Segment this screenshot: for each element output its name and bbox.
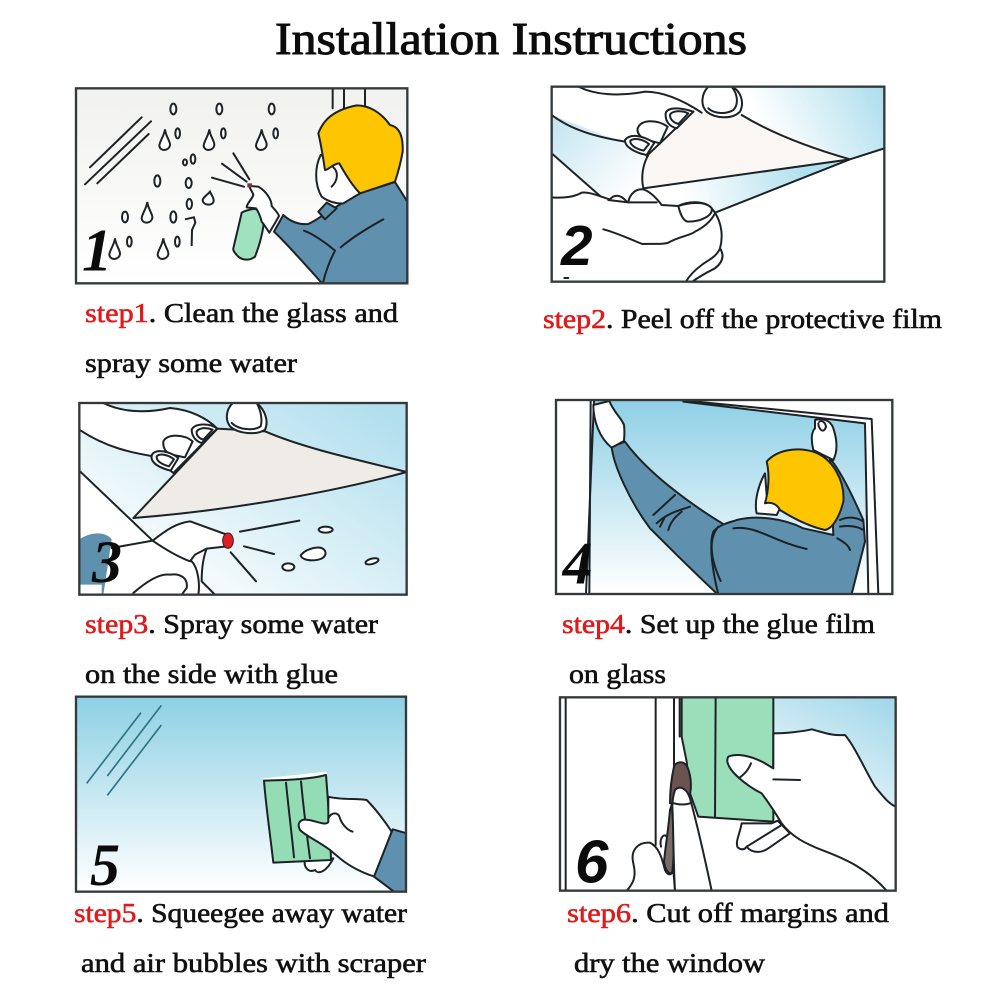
step 5 caption <box>74 898 426 978</box>
numeral: 5 <box>90 832 120 898</box>
step 4 caption: on glass <box>569 659 666 689</box>
lower hand <box>552 153 602 197</box>
step 5 caption: and air bubbles with scraper <box>81 948 426 978</box>
upper hand <box>79 403 217 473</box>
head <box>316 155 360 203</box>
step 3 caption: on the side with glue <box>85 659 338 689</box>
glass <box>587 401 868 594</box>
peeled film <box>133 429 407 518</box>
sleeve <box>374 829 407 892</box>
right hand <box>812 419 836 460</box>
sleeve wrinkles <box>653 495 690 530</box>
spray lines <box>212 153 249 187</box>
numeral: 3 <box>91 529 122 595</box>
glass shine lines <box>87 705 161 795</box>
title: Installation Instructions <box>275 13 747 64</box>
left hand <box>593 401 624 448</box>
panel: step 2 peel film <box>552 87 884 283</box>
panel: step 4 set film on glass <box>556 400 892 597</box>
scraper <box>263 773 327 780</box>
glass <box>698 697 896 891</box>
water drops <box>109 104 278 259</box>
step 4 caption: step4. Set up the glue film <box>562 609 875 639</box>
numeral: 4 <box>562 531 593 597</box>
numeral: 2 <box>560 215 593 278</box>
left arm <box>610 440 724 593</box>
window frame <box>586 400 878 594</box>
glass background <box>758 88 884 158</box>
window frame <box>333 88 365 108</box>
step 1 caption: step1 . Clean the glass and <box>85 298 399 328</box>
peeled film <box>643 112 850 188</box>
panel: step 1 clean and spray <box>76 88 407 284</box>
window frame <box>566 697 680 891</box>
hand <box>299 797 392 877</box>
step 4 caption <box>562 609 875 689</box>
panel: step 6 cut margins <box>560 697 896 896</box>
lower arm and hand <box>79 471 227 595</box>
step 5 caption: step5. Squeegee away water <box>74 898 407 928</box>
numeral: 1 <box>82 218 112 284</box>
collar <box>318 203 337 219</box>
step 1 caption <box>85 298 399 378</box>
cutting knife <box>670 762 691 803</box>
water drops <box>282 527 379 571</box>
left thumb and fingers <box>627 843 675 891</box>
red spray nozzle <box>223 533 233 548</box>
glass shine lines <box>85 117 151 184</box>
step 3 caption: step3. Spray some water <box>85 609 378 639</box>
bottle <box>233 209 263 260</box>
right arm and back <box>711 458 865 594</box>
back fingers <box>773 760 791 780</box>
step 6 caption: dry the window <box>574 948 766 978</box>
panel: step 5 squeegee <box>76 697 407 898</box>
step 2 caption: step2. Peel off the protective film <box>543 304 942 334</box>
lower fingers <box>305 858 333 872</box>
green film <box>682 697 773 822</box>
upper hand <box>552 87 702 142</box>
hair <box>318 105 403 193</box>
step 6 caption: step6 . Cut off margins and <box>567 898 890 928</box>
panel: step 3 spray glue side <box>79 403 407 595</box>
hand with sprayer <box>247 186 279 233</box>
man's body <box>274 182 407 284</box>
face <box>756 473 780 515</box>
hair <box>765 449 843 530</box>
step 6 caption <box>567 898 890 978</box>
numeral: 6 <box>575 829 609 896</box>
step 1 caption: spray some water <box>85 348 297 378</box>
spray lines <box>231 521 299 581</box>
right hand <box>727 729 896 891</box>
step 3 caption <box>85 609 378 689</box>
